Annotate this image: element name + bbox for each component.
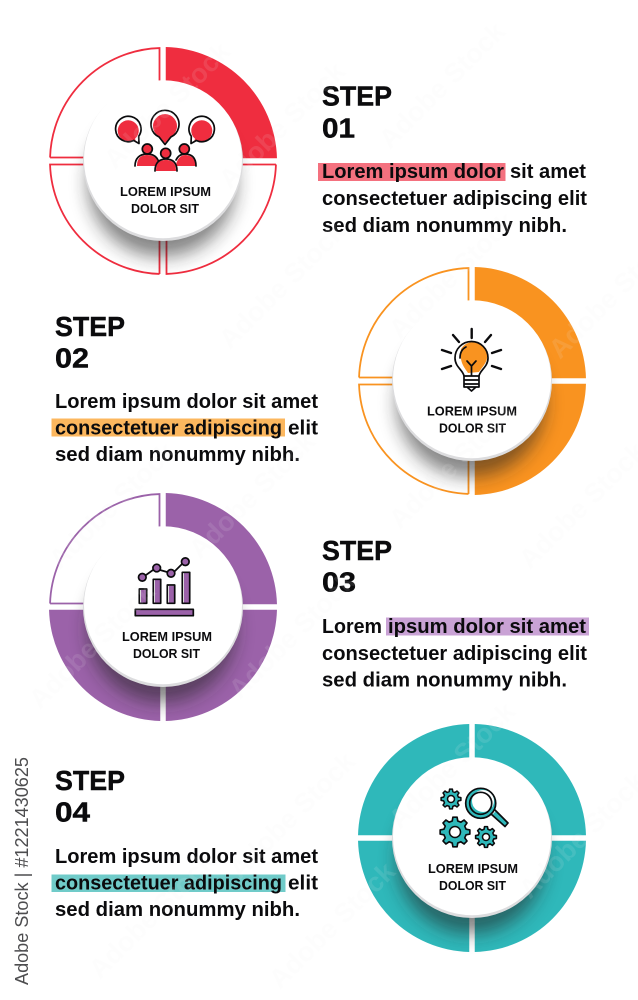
filled segment [166,47,277,158]
label: step 02 center: LOREM IPSUM [427,404,517,418]
label: step 03 center: DOLOR SIT [133,647,200,661]
drop shadow [88,109,236,257]
center disc [392,757,552,918]
icon: light bulb [442,329,501,391]
watermark: Adobe Stock pattern: Adobe Stock [223,566,362,704]
label: step 03 center [122,630,212,661]
watermark: Adobe Stock pattern: Adobe Stock [383,696,522,834]
watermark: Adobe Stock pattern: Adobe Stock [183,426,322,564]
outlined segments [359,268,468,494]
text block: step 03 [322,615,589,692]
text block: step 04: sed diam nonummy nibh. [55,898,300,921]
drop shadow [397,329,545,477]
watermark: Adobe Stock pattern: Adobe Stock [263,856,402,994]
drop shadow [397,786,545,934]
heading: step 01 [322,80,392,144]
text block: step 04 [52,845,318,921]
text block: step 01: Lorem ipsum dolor [322,160,504,183]
text block: step 01: sit amet [510,160,586,183]
text block: step 02: consectetuer adipiscing [55,416,282,440]
panel: step 04 donut [358,724,586,952]
heading: step 04: STEP [55,765,125,796]
text block: step 03: sed diam nonummy nibh. [322,668,567,692]
heading: step 01: STEP [322,80,392,112]
heading: step 03: STEP [322,535,392,566]
text block: step 04: Lorem ipsum dolor sit amet [55,845,318,868]
watermark: Adobe Stock pattern: Adobe Stock [373,16,512,154]
highlight [52,874,286,892]
outlined segment [50,494,160,604]
label: step 04 center: DOLOR SIT [439,879,506,893]
watermark: Adobe Stock pattern: Adobe Stock [223,746,362,884]
icon: gears and magnifier [440,788,508,847]
filled segments [358,724,586,952]
watermark: Adobe Stock pattern: Adobe Stock [213,216,352,354]
text block: step 02: Lorem ipsum dolor sit amet [55,390,318,413]
watermark: Adobe Stock pattern: Adobe Stock [383,206,522,344]
icon: people with speech bubbles [116,110,214,171]
heading: step 03 [322,535,392,598]
center disc [83,80,243,241]
text block: step 03: consectetuer adipiscing elit [322,642,587,665]
watermark: Adobe Stock pattern: Adobe Stock [43,436,182,574]
watermark: Adobe Stock pattern: Adobe Stock [98,36,237,174]
heading: step 04: 04 [55,796,90,828]
label: step 03 center: LOREM IPSUM [122,630,212,644]
label: step 04 center [428,862,518,893]
heading: step 01: 01 [322,112,355,144]
heading: step 03: 03 [322,566,356,598]
drop shadow [88,555,236,703]
center disc [83,526,243,687]
heading: step 02 [55,311,125,374]
text block: step 01 [318,160,587,237]
label: step 01 center [120,185,211,216]
outlined segments [50,48,276,274]
panel: step 01 donut [50,47,277,274]
text block: step 02 [52,390,318,466]
heading: step 02: 02 [55,342,89,374]
watermark: Adobe Stock pattern: Adobe Stock [383,396,522,534]
label: step 04 center: LOREM IPSUM [428,862,518,876]
watermark: Adobe Stock pattern: Adobe Stock [213,56,352,194]
text block: step 03: Lorem [322,615,382,638]
filled segments [49,493,277,721]
panel: step 02 donut [359,267,586,495]
label: step 02 center [427,404,517,436]
highlight [386,618,589,636]
filled segments [475,267,586,495]
watermark: Adobe Stock pattern: Adobe Stock [83,846,222,984]
text block: step 04: consectetuer adipiscing [55,872,282,894]
label: step 01 center: LOREM IPSUM [120,185,211,199]
text block: step 01: sed diam nonummy nibh. [322,214,567,237]
icon: bar chart with trend line [135,558,193,616]
panel: step 03 donut [49,493,277,721]
text block: step 02: sed diam nonummy nibh. [55,443,300,466]
highlight [52,418,285,436]
text block: step 02: elit [288,416,318,440]
highlight [318,163,506,181]
heading: step 04 [55,765,125,828]
credit: vertical stock id: Adobe Stock | #1221430625 [12,757,32,985]
heading: step 02: STEP [55,311,125,342]
watermark: Adobe Stock pattern: Adobe Stock [23,576,162,714]
text block: step 03: ipsum dolor sit amet [388,615,586,638]
label: step 01 center: DOLOR SIT [131,202,199,216]
label: step 02 center: DOLOR SIT [439,422,506,436]
text block: step 01: consectetuer adipiscing elit [322,187,587,210]
center disc [392,300,552,461]
text block: step 04: elit [288,872,318,894]
